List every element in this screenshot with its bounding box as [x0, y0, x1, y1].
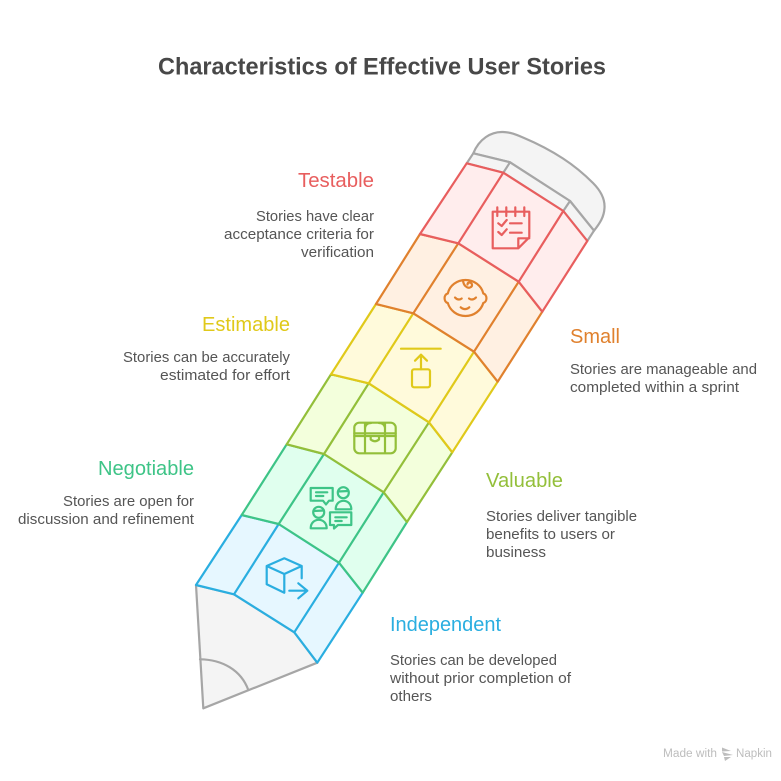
text block: independent: [389, 614, 572, 705]
watermark: [663, 748, 772, 761]
text block: testable: verification: [301, 245, 374, 261]
text block: valuable: Stories deliver tangible: [486, 509, 637, 525]
icon: treasure chest: [354, 423, 396, 453]
text block: independent: others: [390, 689, 432, 705]
text block: independent: Independent: [390, 614, 501, 636]
icon: box with arrow: [267, 558, 307, 598]
text block: estimable: [123, 314, 291, 384]
text block: small: Stories are manageable and: [570, 362, 757, 378]
text block: estimable: estimated for effort: [160, 368, 290, 384]
text block: testable: Stories have clear: [256, 209, 374, 225]
segment: negotiable (teal): [242, 444, 407, 593]
watermark: Made with: [663, 748, 717, 760]
eraser: [467, 132, 605, 241]
icon: baby face: [445, 280, 486, 316]
text block: testable: acceptance criteria for: [224, 227, 374, 243]
text block: negotiable: Stories are open for: [63, 494, 194, 510]
title: Characteristics of Effective User Stories: [158, 54, 606, 80]
segment: small (orange): [376, 234, 542, 382]
segment: estimable (yellow): [331, 304, 498, 452]
text block: small: [570, 326, 757, 396]
text block: valuable: Valuable: [486, 470, 563, 492]
text block: small: Small: [570, 326, 620, 348]
text block: small: completed within a sprint: [570, 380, 739, 396]
text block: valuable: business: [486, 545, 546, 561]
watermark: Napkin: [736, 748, 772, 760]
text block: negotiable: Negotiable: [98, 458, 194, 480]
text block: estimable: Stories can be accurately: [123, 350, 291, 366]
text block: estimable: Estimable: [202, 314, 290, 336]
text block: negotiable: discussion and refinement: [18, 512, 194, 528]
segment: testable (red): [420, 163, 587, 312]
icon: upward arrow to line: [401, 349, 441, 387]
text block: testable: [224, 170, 374, 261]
pencil tip: [196, 585, 317, 708]
icon: people in discussion: [311, 487, 351, 528]
text block: independent: without prior completion of: [389, 671, 572, 687]
text block: testable: Testable: [298, 170, 374, 192]
text block: negotiable: [18, 458, 194, 528]
segment: independent (blue): [196, 515, 363, 663]
icon: checklist calendar: [493, 207, 529, 248]
pencil diagram: [196, 132, 605, 708]
segment: valuable (green): [287, 374, 452, 522]
text block: valuable: [486, 470, 637, 561]
text block: independent: Stories can be developed: [390, 653, 557, 669]
text block: valuable: benefits to users or: [486, 527, 615, 543]
